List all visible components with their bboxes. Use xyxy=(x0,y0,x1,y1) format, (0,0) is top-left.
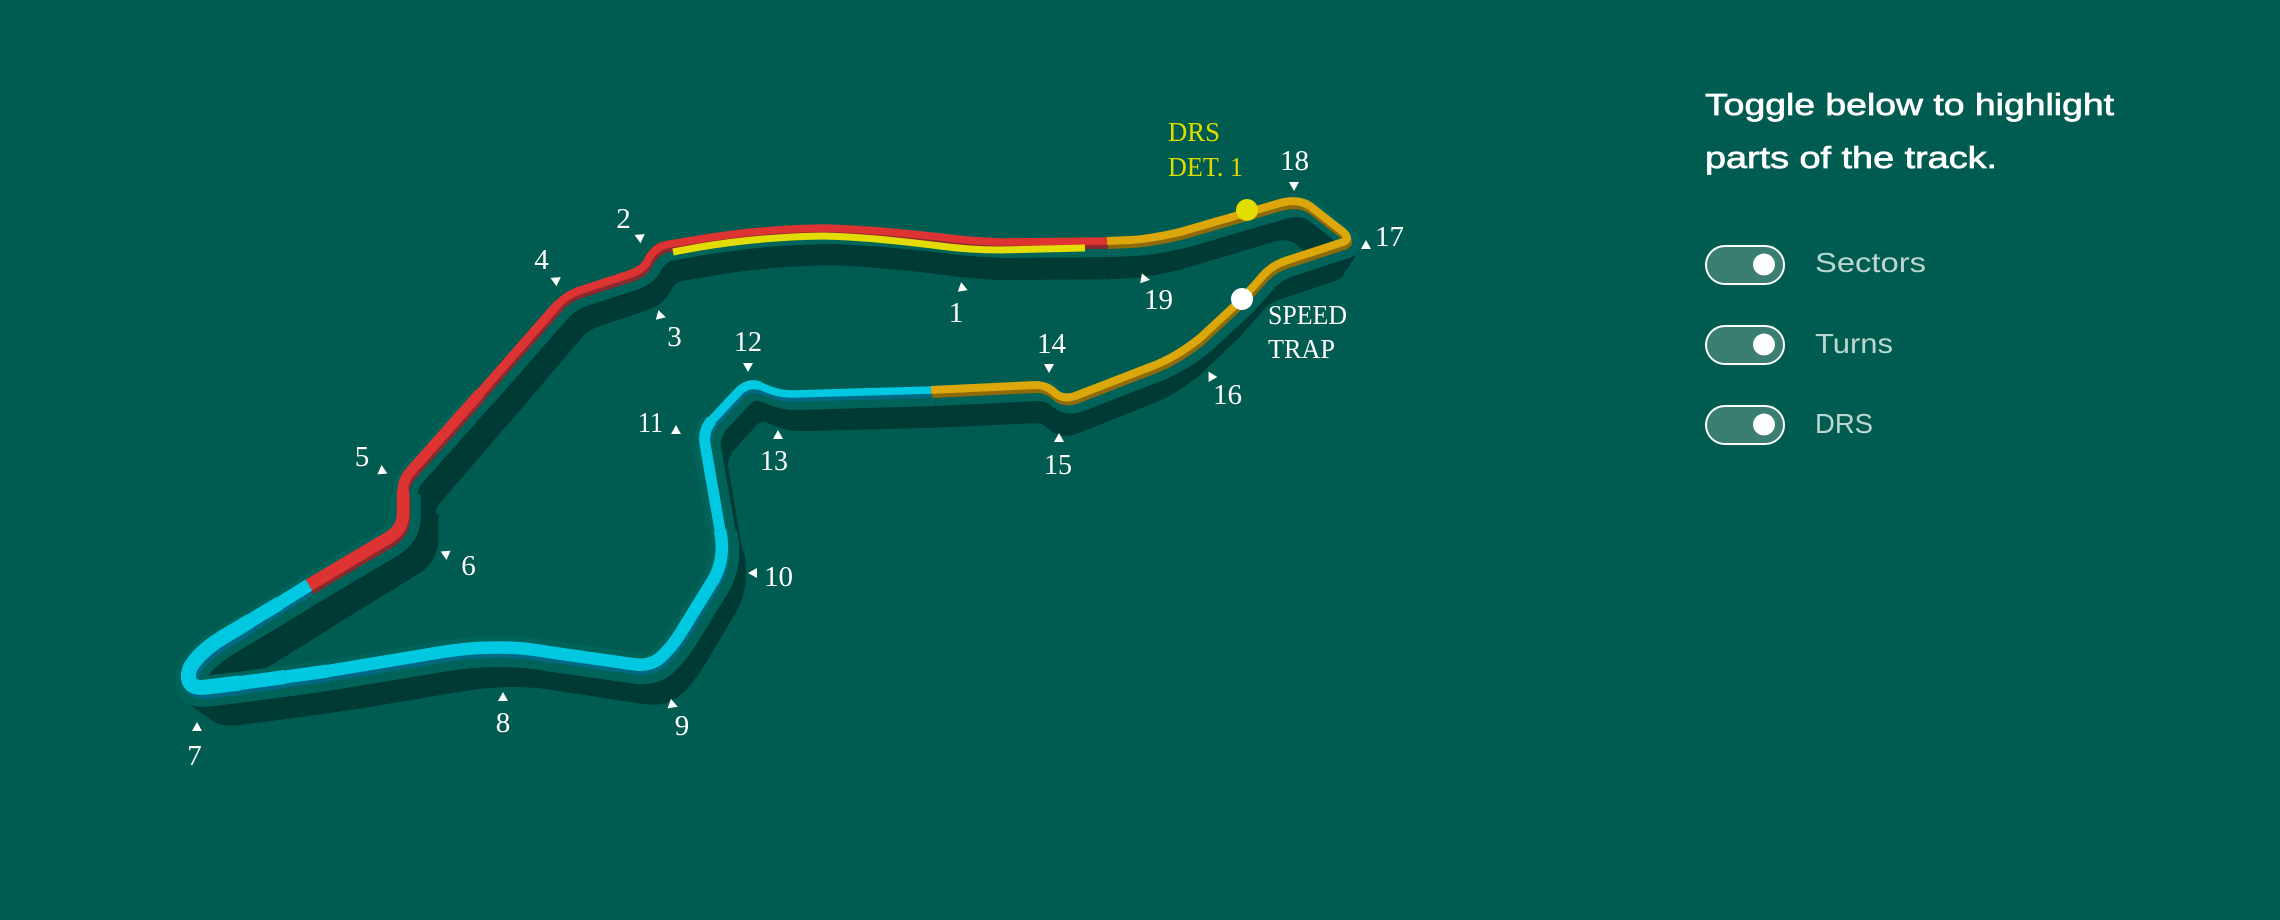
turn 1 xyxy=(949,281,968,329)
turn 16: 16 xyxy=(1213,379,1242,411)
turn 1: 1 xyxy=(949,297,963,329)
turn 3: 3 xyxy=(667,321,682,353)
turn 2: 2 xyxy=(616,203,631,235)
DRS detection label: DRS xyxy=(1168,117,1220,147)
speed trap label: TRAP xyxy=(1268,334,1335,364)
turn 10 xyxy=(748,561,793,593)
turn 4 xyxy=(534,244,561,286)
panel heading: Toggle below to highlight xyxy=(1705,87,2114,122)
turn 7: 7 xyxy=(187,740,202,772)
sector 1 track: red xyxy=(309,228,1107,585)
turn 17 xyxy=(1361,221,1404,253)
toggle: sectors xyxy=(1706,246,1926,284)
turn 19: 19 xyxy=(1144,284,1173,316)
track under-edge dark tones xyxy=(191,205,1348,691)
turn 8: 8 xyxy=(496,707,510,739)
toggle: turns xyxy=(1706,326,1893,364)
turn 6 xyxy=(441,550,476,582)
speed trap dot xyxy=(1231,288,1253,310)
sector 2 track: orange xyxy=(931,201,1347,397)
turn 16 xyxy=(1204,369,1242,411)
panel heading xyxy=(1705,87,2114,175)
track extruded shadow xyxy=(199,214,1346,712)
turn 15 xyxy=(1044,433,1072,481)
speed trap label xyxy=(1268,300,1347,364)
toggle: DRS xyxy=(1706,406,1873,444)
turn 17: 17 xyxy=(1375,221,1404,253)
turn 18: 18 xyxy=(1280,145,1309,177)
toggle: DRS: DRS xyxy=(1815,408,1873,439)
DRS detection label xyxy=(1168,117,1243,182)
DRS zone line xyxy=(673,236,1085,252)
speed trap label: SPEED xyxy=(1268,300,1347,330)
turn 7 xyxy=(187,722,202,772)
DRS detection label: DET. 1 xyxy=(1168,152,1243,182)
turn 15: 15 xyxy=(1044,449,1072,481)
turn 13: 13 xyxy=(760,445,788,477)
turn 18 xyxy=(1280,145,1309,191)
turn 14: 14 xyxy=(1037,328,1066,360)
turn 3 xyxy=(656,310,682,353)
turn 14 xyxy=(1037,328,1066,373)
turn 13 xyxy=(760,430,788,477)
turn 5: 5 xyxy=(355,441,369,473)
turn 4: 4 xyxy=(534,244,549,276)
turn 9 xyxy=(668,699,689,742)
track map xyxy=(188,199,1351,712)
turn 10: 10 xyxy=(764,561,793,593)
track halo xyxy=(190,207,1351,691)
turn 6: 6 xyxy=(461,550,476,582)
turn 5 xyxy=(355,441,387,474)
sector 3 track: cyan xyxy=(188,385,931,687)
DRS detection dot xyxy=(1236,199,1258,221)
panel heading: parts of the track. xyxy=(1705,140,1997,175)
turn 2 xyxy=(616,203,645,243)
turn 8 xyxy=(496,692,510,739)
turn 11 xyxy=(638,407,681,439)
turn 12 xyxy=(734,326,762,372)
toggle: turns: Turns xyxy=(1815,328,1893,359)
turn markers xyxy=(187,145,1404,772)
turn 9: 9 xyxy=(675,710,689,742)
toggle panel xyxy=(1705,87,2114,444)
turn 11: 11 xyxy=(638,407,663,439)
turn 12: 12 xyxy=(734,326,762,358)
toggle: sectors: Sectors xyxy=(1815,247,1926,278)
turn 19 xyxy=(1140,273,1173,316)
